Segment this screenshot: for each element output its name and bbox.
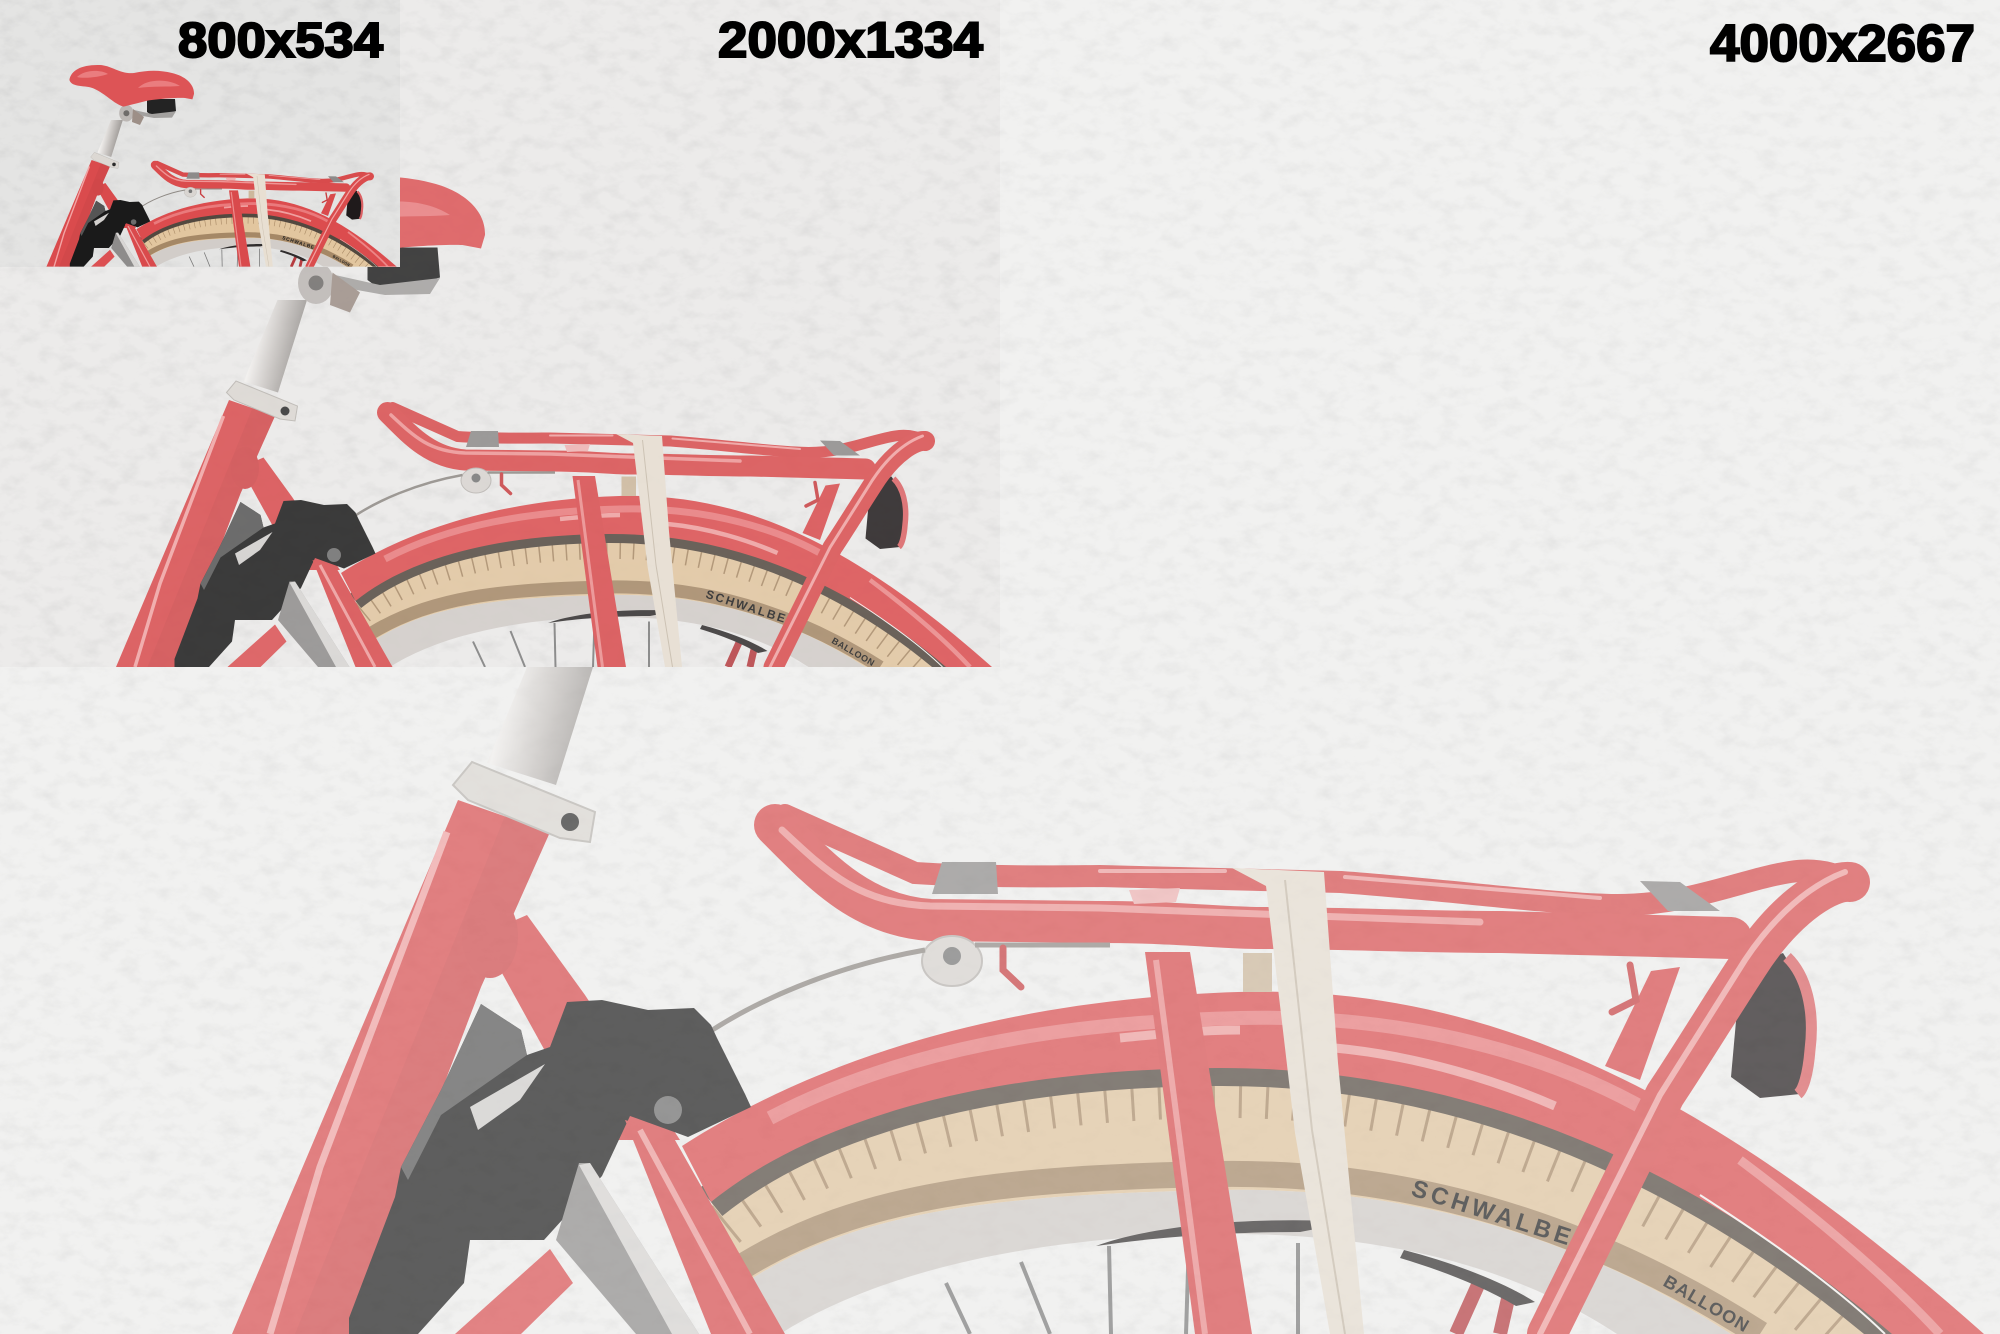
size label 2000x1334: 2000x1334 bbox=[718, 12, 983, 68]
panel: 800x534 small image bbox=[0, 0, 400, 268]
bicycle medium bbox=[116, 162, 992, 668]
size label 4000x2667: 4000x2667 bbox=[1710, 15, 1975, 73]
bicycle large bbox=[232, 325, 1984, 1334]
plaster texture medium bbox=[0, 0, 1000, 667]
plaster texture small bbox=[0, 0, 400, 267]
wall background medium bbox=[347, 324, 970, 667]
wall background small bbox=[174, 162, 400, 267]
size label 800x534: 800x534 bbox=[178, 14, 383, 68]
bicycle small bbox=[46, 65, 397, 268]
panel: 2000x1334 medium image bbox=[116, 21, 992, 667]
